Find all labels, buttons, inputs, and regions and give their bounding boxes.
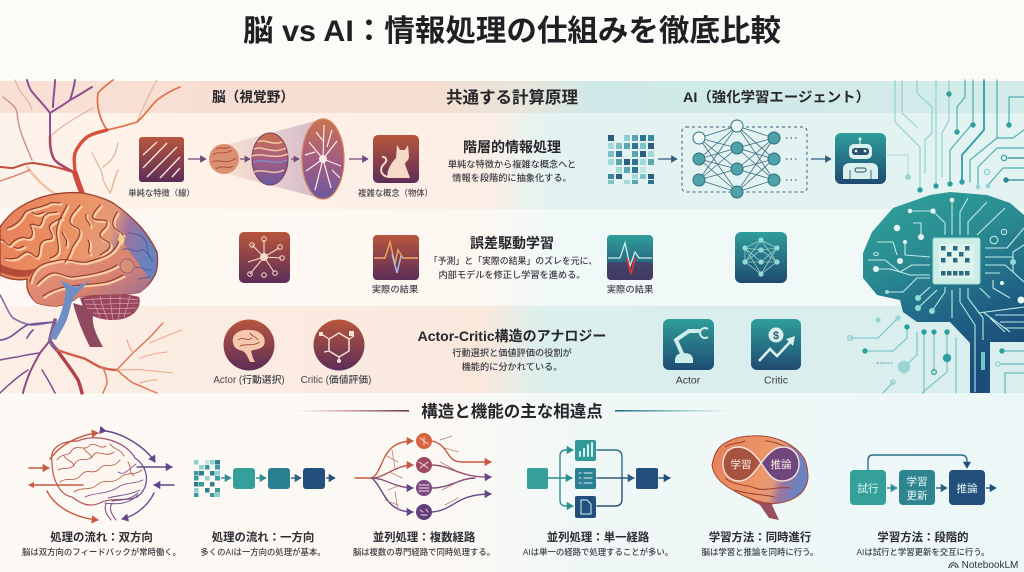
row 3 center text: actor-critic analogy: 機能的に分かれている。: [462, 361, 562, 372]
brain sulci: [0, 203, 123, 296]
row 2 center text: error-driven learning: 内部モデルを修正し学習を進める。: [438, 269, 586, 280]
heading: AI column: AI（強化学習エージェント）: [683, 89, 870, 105]
icon: brain error wave: [373, 235, 419, 280]
cerebellum: [80, 294, 140, 320]
icon: robot: [835, 133, 886, 184]
label: Actor (行動選択): [213, 373, 285, 386]
text: [523, 530, 673, 557]
icon: trial update inference: 推論: [956, 482, 978, 495]
text: [702, 530, 818, 557]
icon: parallel brain pathways: [355, 433, 491, 520]
icon: neuron: [239, 232, 290, 283]
title: 脳 vs AI：情報処理の仕組みを徹底比較: [243, 15, 781, 48]
row 2 center text: error-driven learning: 「予測」と「実際の結果」のズレを元に、: [429, 255, 597, 266]
illustration: circuit traces: [850, 80, 1024, 393]
text: 処理の流れ：双方向: [50, 530, 153, 544]
row 1 brain: hierarchical visual processing: [128, 119, 433, 199]
occipital folds: [122, 232, 153, 280]
occipital knob: [120, 259, 134, 273]
icon: brain with learning and inference: [712, 436, 808, 520]
brainstem: [73, 303, 103, 347]
icon: brain with learning and inference: 学習: [730, 458, 752, 471]
neural network: [682, 120, 807, 198]
icon: simple line features: [139, 137, 184, 182]
label: 実際の結果: [607, 284, 654, 294]
row 3 center text: actor-critic analogy: 行動選択と価値評価の役割が: [452, 347, 572, 358]
difference 1: brain bidirectional: [22, 431, 181, 557]
text: 処理の流れ：一方向: [212, 530, 314, 544]
arrow: [658, 158, 677, 160]
row 2 brain: error signal icons: [239, 232, 419, 294]
difference 5: brain simultaneous: [702, 436, 818, 557]
text: [22, 530, 181, 557]
cerebrum: [0, 193, 158, 306]
icon: trial update inference: 試行: [858, 482, 879, 495]
illustration: AI circuit brain: [863, 192, 1024, 393]
circuit brain traces: [868, 198, 1024, 332]
row 1 center text: hierarchical processing: 単純な特徴から複雑な概念へと: [448, 158, 576, 170]
text: 並列処理：複数経路: [373, 530, 476, 544]
text: AIは試行と学習更新を交互に行う。: [856, 547, 990, 557]
text: [856, 530, 990, 557]
central chip: [933, 238, 980, 284]
difference 3: brain parallel: [353, 433, 495, 557]
difference 6: AI stepwise: [850, 455, 996, 557]
label: 単純な特徴（線）: [128, 188, 195, 198]
arrow: [188, 158, 206, 160]
row 3 center text: actor-critic analogy: Actor-Critic構造のアナロジー: [418, 328, 606, 344]
circuit brain body: [863, 192, 1024, 393]
section heading: key differences: 構造と機能の主な相違点: [421, 401, 603, 421]
row 3 brain: actor and critic: [213, 320, 371, 386]
label: Critic (価値評価): [301, 373, 371, 386]
row 1 center text: hierarchical processing: [448, 139, 576, 183]
text: [353, 530, 495, 557]
icon: critic molecule: [314, 320, 364, 370]
pixel input grid: [608, 135, 654, 184]
label: Actor: [676, 374, 701, 386]
icon: sequential pipeline: [194, 460, 335, 497]
illustration: biological neuron branches: [0, 80, 182, 393]
icon: trial update inference: [850, 455, 996, 505]
row 2 AI: error signal icons: [607, 232, 787, 294]
arrow: [811, 158, 831, 160]
text: 脳は複数の専門経路で同時処理する。: [353, 547, 495, 557]
yellow highlight: [118, 232, 125, 246]
row 1 center text: hierarchical processing: 階層的情報処理: [463, 139, 561, 155]
icon: network: [735, 232, 787, 283]
icon: actor brain: [224, 320, 274, 370]
icon: trial update inference: 更新: [906, 490, 928, 502]
text: 脳は双方向のフィードバックが常時働く。: [22, 547, 181, 557]
label: 複雑な概念（物体）: [358, 188, 433, 198]
frontal lobe shadow: [0, 264, 37, 277]
watermark: NotebookLM: NotebookLM: [962, 560, 1018, 571]
label: Critic: [764, 374, 788, 386]
text: [200, 530, 326, 557]
brain folds: [2, 204, 125, 298]
row 2 center text: error-driven learning: 誤差駆動学習: [470, 235, 554, 251]
row 3 center text: actor-critic analogy: [418, 328, 606, 372]
row 1 AI: pixels, neural network, robot: [608, 120, 886, 198]
text: 学習方法：段階的: [877, 530, 969, 544]
icon: cat: [373, 135, 419, 183]
text: 学習方法：同時進行: [709, 530, 811, 544]
difference 2: AI one-way: [194, 460, 335, 557]
icon: value chart: $: [773, 330, 779, 342]
icon: brain with bidirectional arrows: [28, 431, 174, 520]
blue vessel over brain: [50, 280, 90, 340]
icon: trial update inference: 学習: [906, 475, 928, 488]
heading: shared principles column: 共通する計算原理: [446, 87, 578, 107]
temporal lobe: [29, 240, 150, 306]
visual cortex hierarchy funnel: [209, 119, 344, 199]
text: 脳は学習と推論を同時に行う。: [702, 547, 818, 557]
text: AIは単一の経路で処理することが多い。: [523, 547, 673, 557]
text: 多くのAIは一方向の処理が基本。: [200, 547, 326, 557]
arrow: [349, 158, 368, 160]
text: 並列処理：単一経路: [547, 530, 650, 544]
heading: brain column: 脳（視覚野）: [212, 89, 294, 105]
icon: AI error wave: [607, 235, 653, 280]
circuit nodes: [848, 91, 1012, 384]
icon: brain with learning and inference: 推論: [770, 458, 792, 471]
row 2 center text: error-driven learning: [429, 235, 597, 280]
difference 4: AI single path: [523, 440, 673, 557]
row 1 center text: hierarchical processing: 情報を段階的に抽象化する。: [452, 172, 572, 183]
icon: robot arm: [663, 319, 714, 370]
row 3 AI: actor and critic: [663, 319, 801, 386]
label: 実際の結果: [372, 284, 419, 294]
icon: branching single path: [527, 440, 670, 518]
illustration: human brain: [0, 193, 158, 347]
